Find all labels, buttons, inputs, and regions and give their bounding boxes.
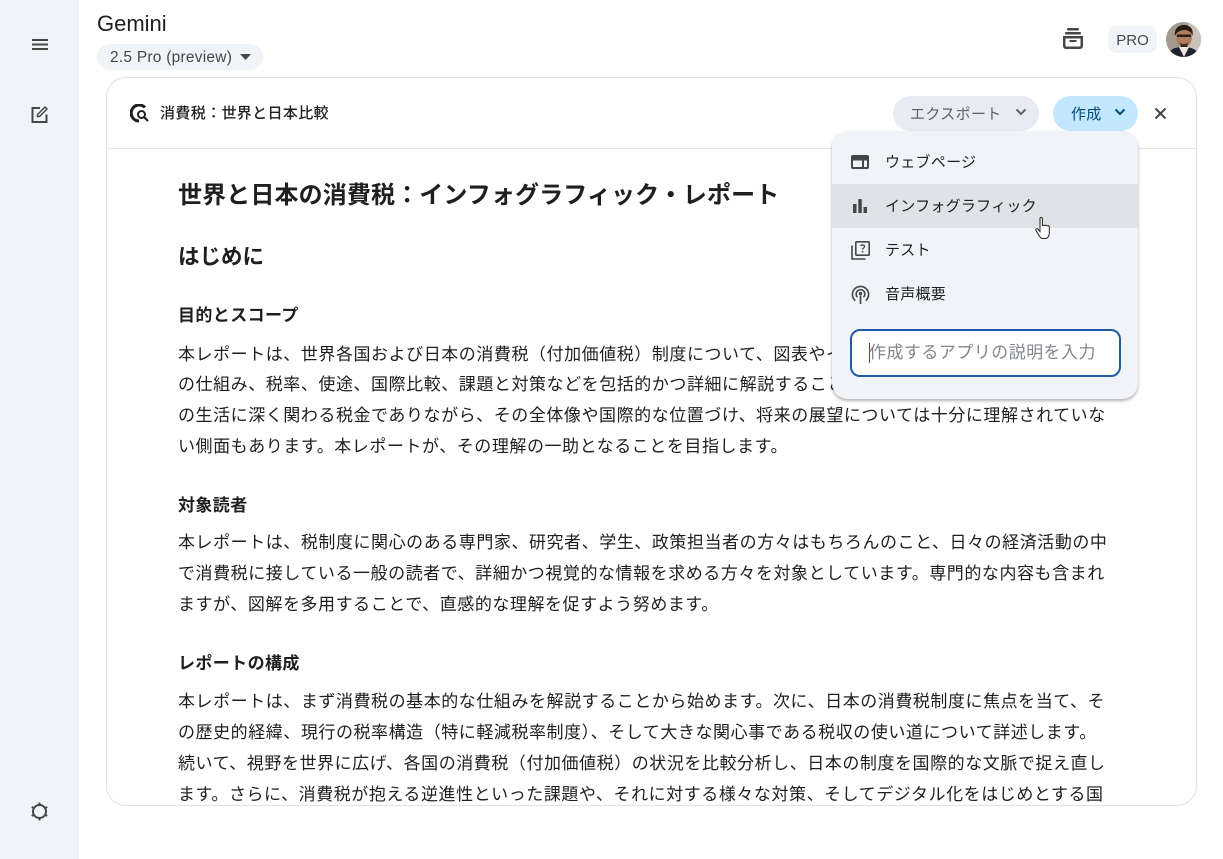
PRO badge [1108, 26, 1157, 53]
label: infographic: インフォグラフィック [885, 198, 1037, 214]
input placeholder: 作成するアプリの説明を入力 [869, 343, 1096, 362]
menu item: infographic [853, 198, 1037, 214]
icon: export chevron [1016, 108, 1026, 116]
paragraph: readers: ますが、図解を多用することで、直感的な理解を促すよう努めます。 [178, 595, 719, 614]
icon: document search [130, 104, 149, 122]
icon: podcast [852, 286, 870, 304]
paragraph: purpose: 本レポートは、世界各国および日本の消費税（付加価値税）制度について、図表やイラストを多用し、その [178, 345, 1019, 364]
avatar [1166, 22, 1201, 57]
model selector [97, 44, 263, 70]
paragraph: readers: 本レポートは、税制度に関心のある専門家、研究者、学生、政策担当者の方々はもちろんのこと、日々の経済活動の中 [178, 533, 1107, 552]
paragraph: purpose: の仕組み、税率、使途、国際比較、課題と対策などを包括的かつ詳細に解説することを目的としています。 [178, 375, 1018, 394]
menu highlight [832, 184, 1138, 228]
export label: エクスポート [910, 106, 1002, 122]
export button [893, 96, 1039, 131]
icon: archive [1063, 28, 1083, 49]
icon: menu [32, 39, 48, 50]
paragraph: structure: 本レポートは、まず消費税の基本的な仕組みを解説することから始めます。次に、日本の消費税制度に焦点を当て、そ [178, 692, 1105, 711]
paragraph: purpose: い側面もあります。本レポートが、その理解の一助となることを目指します。 [178, 437, 788, 456]
paragraph: readers [178, 533, 1107, 614]
label: test: テスト [885, 242, 931, 258]
menu item: web page [851, 154, 976, 170]
icon: quiz [851, 241, 870, 260]
panel: create dropdown menu [832, 131, 1138, 399]
section: purpose and scope [178, 306, 1106, 456]
PRO badge: PRO [1116, 32, 1149, 49]
report title: 世界と日本の消費税：インフォグラフィック・レポート [178, 182, 779, 209]
subheading: purpose and scope: 目的とスコープ [178, 306, 299, 325]
app title: Gemini [97, 11, 167, 36]
icon: dropdown arrow [240, 54, 251, 60]
text input [850, 329, 1121, 377]
subheading: report structure: レポートの構成 [178, 654, 300, 673]
menu item: test [851, 241, 931, 260]
section: target readers [178, 496, 1107, 614]
paragraph: readers: で消費税に接している一般の読者で、詳細かつ視覚的な情報を求める方々を対象としています。専門的な内容も含まれ [178, 564, 1105, 583]
panel: document card [106, 77, 1197, 806]
card header divider [107, 148, 1196, 149]
section: report structure [178, 654, 1106, 804]
label: audio overview: 音声概要 [885, 286, 946, 302]
paragraph: purpose [178, 345, 1106, 456]
paragraph: structure [178, 692, 1106, 804]
input caret [869, 343, 870, 363]
sidebar [0, 0, 79, 859]
icon: new chat [32, 106, 48, 123]
paragraph: purpose: の生活に深く関わる税金でありながら、その全体像や国際的な位置づけ、将来の展望については十分に理解されていな [178, 406, 1106, 425]
card title: 消費税：世界と日本比較 [160, 105, 329, 122]
icon: create chevron [1114, 108, 1126, 116]
create label: 作成 [1071, 106, 1102, 122]
subheading: target readers: 対象読者 [178, 496, 248, 515]
paragraph: structure: の歴史的経緯、現行の税率構造（特に軽減税率制度）、そして大きな関心事である税収の使い道について詳述します。 [178, 723, 1097, 742]
label: web page: ウェブページ [885, 154, 976, 170]
icon: web page [851, 155, 869, 169]
menu item: audio overview [852, 286, 946, 304]
icon: hand cursor [1035, 217, 1050, 239]
paragraph: structure: 続いて、視野を世界に広げ、各国の消費税（付加価値税）の状況を比較分析し、日本の制度を国際的な文脈で捉え直し [178, 754, 1106, 773]
paragraph: structure: ます。さらに、消費税が抱える逆進性といった課題や、それに対する様々な対策、そしてデジタル化をはじめとする国 [178, 785, 1104, 804]
create button [1053, 96, 1138, 131]
heading: introduction: はじめに [178, 245, 264, 269]
close button [1154, 108, 1166, 120]
model label: 2.5 Pro (preview) [110, 49, 232, 66]
icon: settings [31, 802, 48, 820]
icon: bar chart [853, 199, 867, 213]
